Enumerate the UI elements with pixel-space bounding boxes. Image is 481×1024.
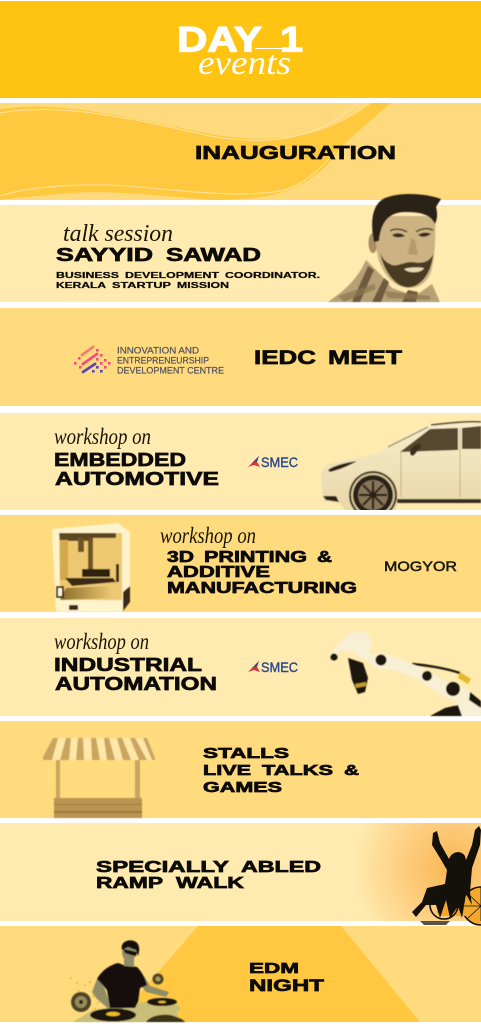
text: stalls live talks games: &	[344, 763, 360, 779]
photo: speaker portrait	[328, 194, 441, 302]
heading: day 1: DAY	[177, 20, 262, 60]
text: stalls live talks games: TALKS	[262, 763, 333, 779]
panel: talk session	[0, 194, 481, 302]
logo: smec: SMEC	[261, 454, 298, 470]
text: edm night	[249, 961, 324, 995]
text: workshop on: workshop on	[54, 424, 151, 449]
text: 3d printing and additive manufacturing	[167, 549, 357, 597]
logo: iedc	[74, 346, 224, 376]
text: 3d printing and additive manufacturing: ADDITIVE	[167, 564, 270, 581]
text: speaker name: SAYYID	[56, 245, 153, 265]
heading: day 1	[177, 20, 303, 60]
wave background	[0, 103, 391, 200]
text: specially abled ramp walk: ABLED	[241, 859, 321, 876]
panel: edm night	[0, 926, 481, 1022]
text: iedc meet	[254, 347, 402, 369]
background glow	[350, 823, 481, 921]
text: speaker role: BUSINESS	[56, 270, 119, 280]
text: 3d printing and additive manufacturing: &	[317, 549, 332, 566]
logo: smec	[248, 454, 298, 470]
text: speaker role: DEVELOPMENT	[125, 270, 220, 280]
text: inauguration: INAUGURATION	[195, 142, 396, 163]
text: 3d printing and additive manufacturing: PRINTING	[204, 549, 307, 566]
text: stalls live talks games	[203, 746, 360, 796]
text: stalls live talks games: LIVE	[203, 763, 251, 779]
text: iedc meet: MEET	[328, 347, 402, 369]
logo: mogyor: MOGYOR	[384, 558, 457, 574]
background trapezoid	[115, 926, 420, 1022]
text: specially abled ramp walk: WALK	[176, 875, 245, 892]
image: car	[321, 422, 481, 519]
heading: events script: events	[198, 45, 291, 82]
panel: iedc meet	[0, 308, 481, 406]
panel: industrial automation	[0, 618, 481, 716]
text: workshop on: workshop on	[54, 629, 149, 654]
text: embedded automotive: AUTOMOTIVE	[55, 469, 219, 489]
image: dj	[70, 940, 185, 1022]
image: market stall	[43, 738, 155, 818]
text: specially abled ramp walk: SPECIALLY	[96, 859, 229, 876]
text: embedded automotive: EMBEDDED	[54, 450, 186, 470]
text: iedc name: DEVELOPMENT CENTRE	[117, 366, 224, 376]
text: iedc meet: IEDC	[254, 347, 316, 369]
logo: smec	[248, 659, 298, 675]
text: speaker role	[56, 270, 320, 290]
text: specially abled ramp walk: RAMP	[96, 875, 163, 892]
heading: day 1: 1	[280, 20, 303, 60]
text: industrial automation: INDUSTRIAL	[54, 655, 202, 675]
text: edm night: NIGHT	[249, 977, 324, 995]
panel: inauguration	[0, 103, 481, 200]
image: 3d printer	[52, 523, 130, 612]
panel: ramp walk	[0, 823, 481, 925]
panel: stalls	[0, 721, 481, 818]
text: edm night: EDM	[249, 961, 299, 977]
text: speaker role: KERALA	[56, 280, 106, 290]
panel: 3d printing	[0, 515, 481, 612]
text: speaker role: COORDINATOR.	[225, 270, 320, 280]
text: speaker name: SAWAD	[166, 245, 261, 265]
text: stalls live talks games: STALLS	[203, 746, 290, 762]
text: workshop on: workshop on	[160, 523, 256, 548]
text: 3d printing and additive manufacturing: 3D	[167, 549, 194, 566]
text: iedc name: INNOVATION AND	[117, 346, 199, 356]
panel: embedded automotive	[0, 413, 481, 519]
icon: iedc mark	[74, 347, 111, 373]
text: iedc name	[117, 346, 224, 376]
text: iedc name: ENTREPRENEURSHIP	[117, 356, 209, 366]
text: specially abled ramp walk	[96, 859, 321, 892]
text: industrial automation: AUTOMATION	[55, 674, 217, 694]
text: speaker name	[56, 245, 261, 265]
image: robot arm	[330, 632, 481, 716]
text: speaker role: STARTUP	[112, 280, 171, 290]
text: speaker role: MISSION	[177, 280, 229, 290]
text: industrial automation	[54, 655, 217, 694]
panel: header	[0, 1, 481, 98]
logo: smec: SMEC	[261, 659, 298, 675]
text: talk session: talk session	[63, 221, 173, 247]
text: embedded automotive	[54, 450, 219, 489]
text: 3d printing and additive manufacturing: MANUFACTURING	[167, 580, 357, 597]
text: stalls live talks games: GAMES	[203, 780, 282, 796]
image: wheelchair silhouette	[412, 826, 481, 925]
